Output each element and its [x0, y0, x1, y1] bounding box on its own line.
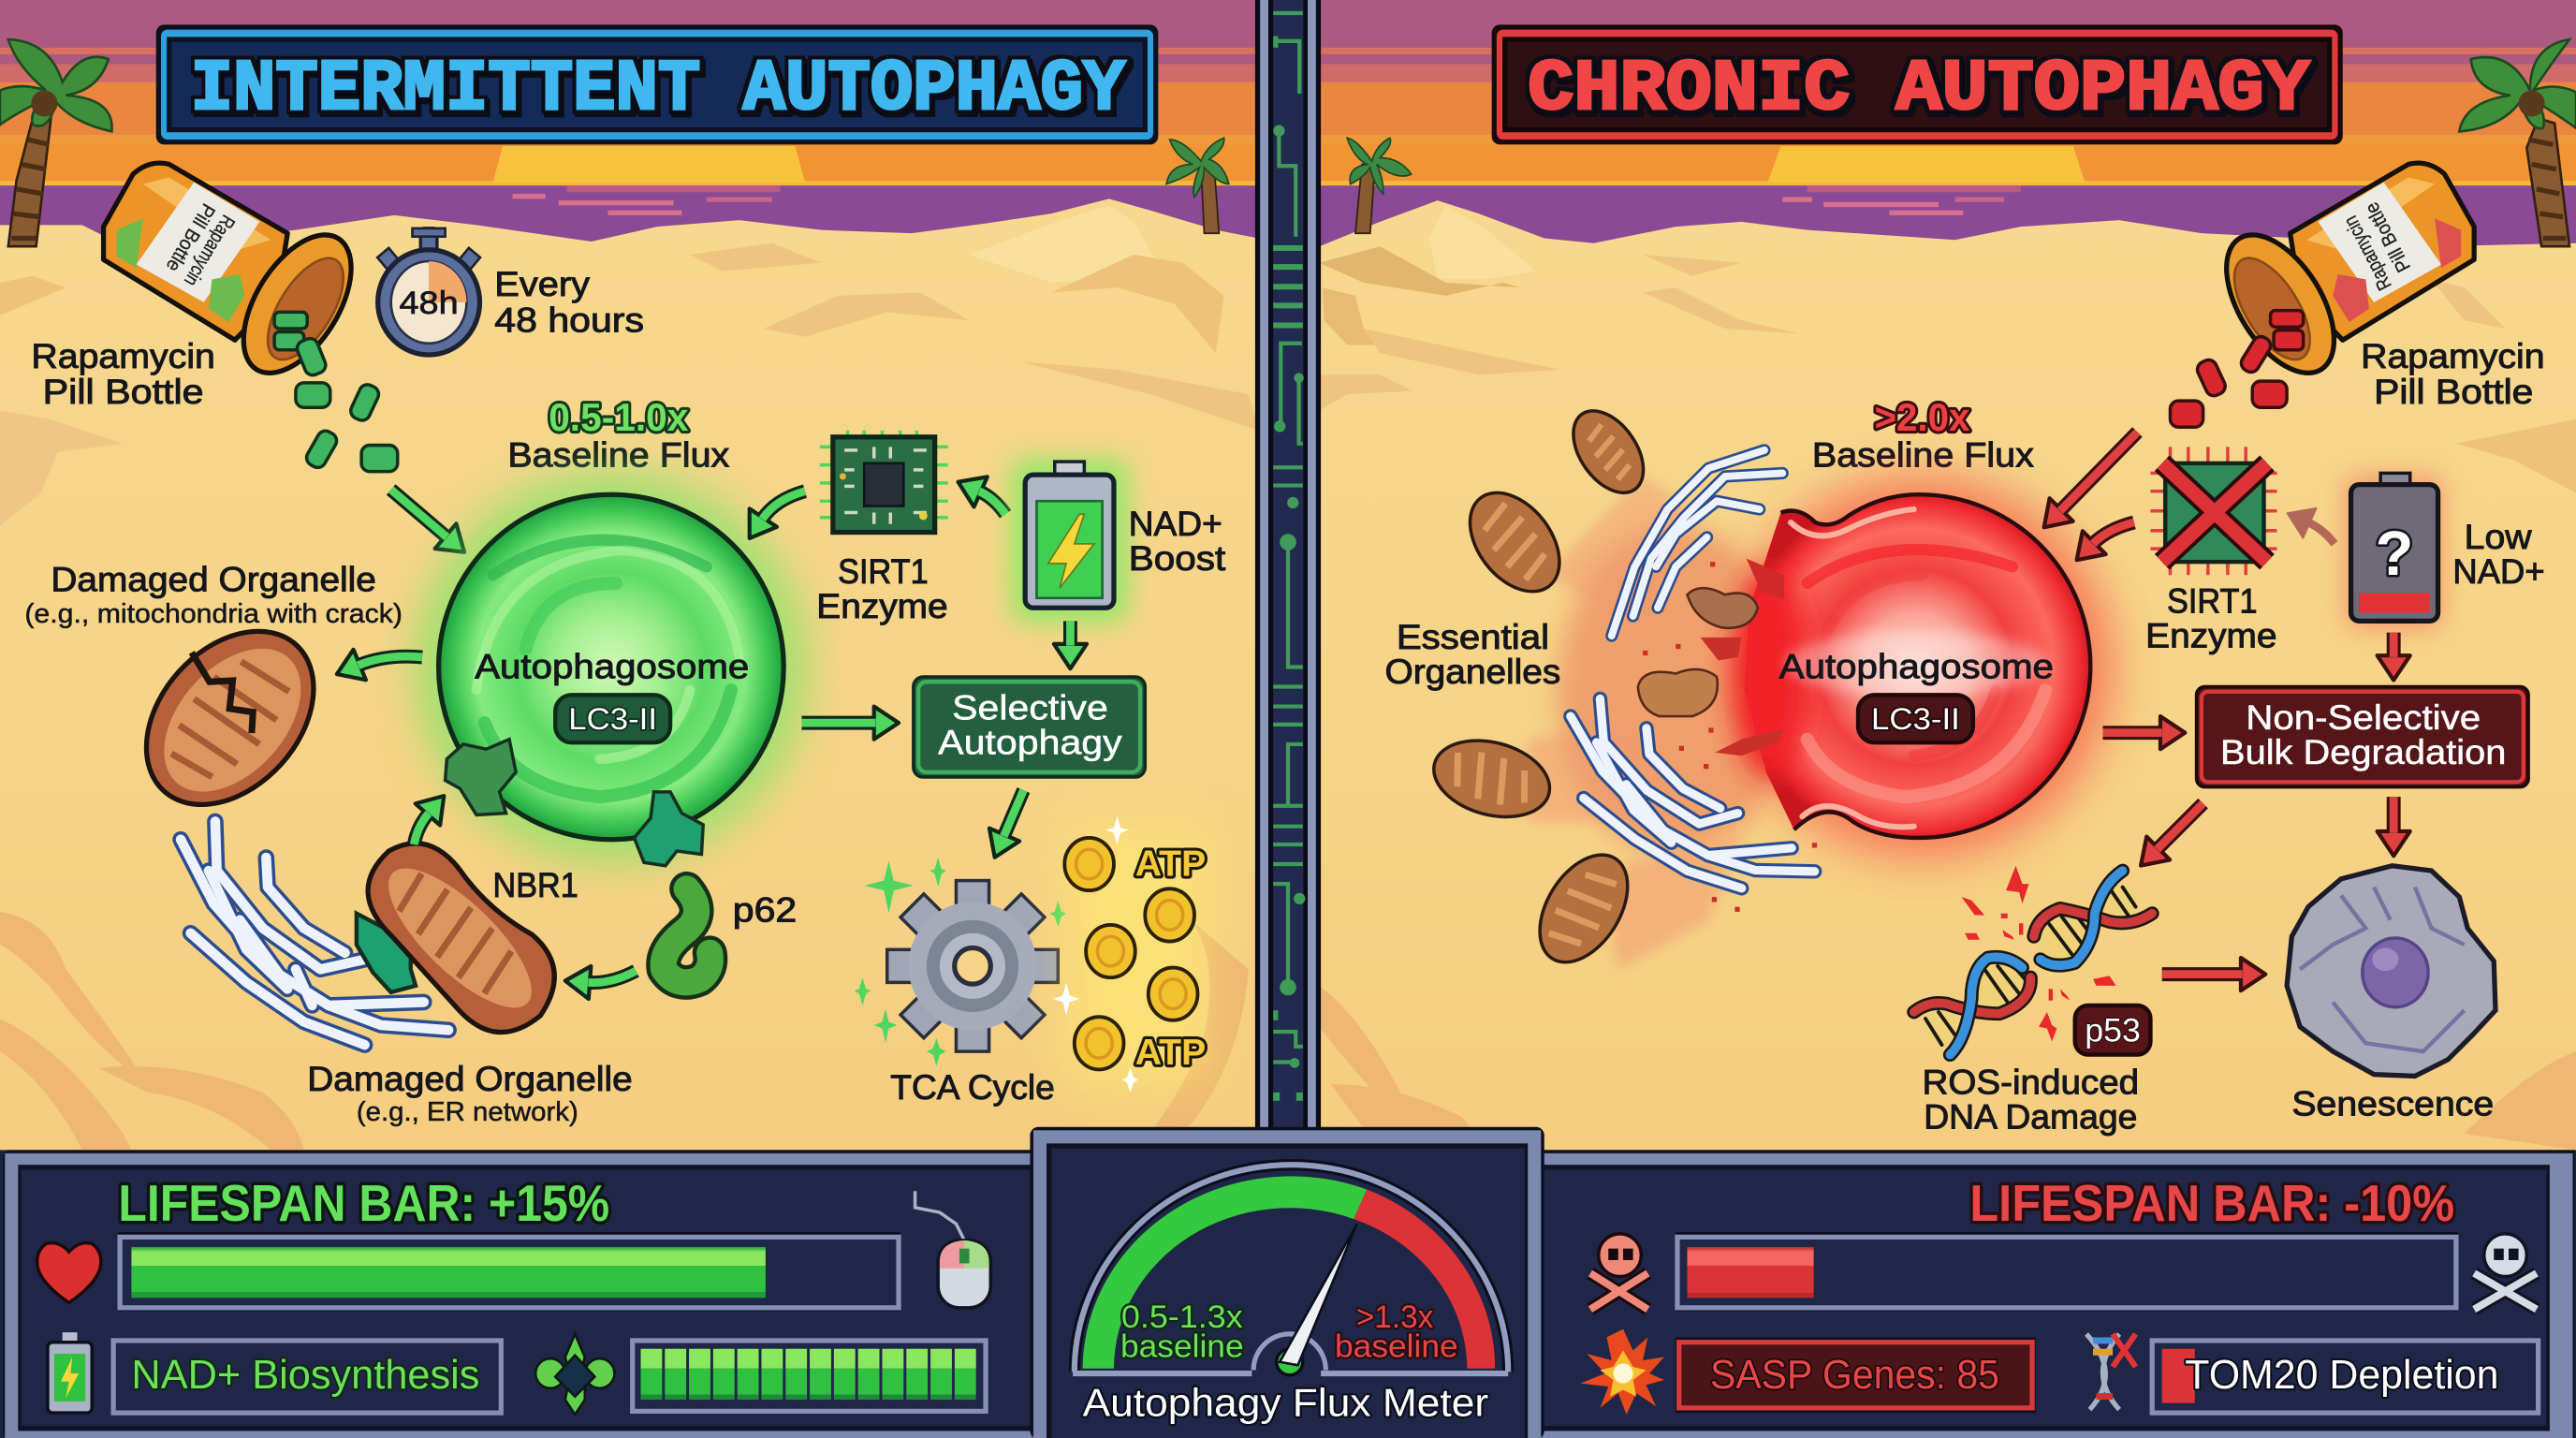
arrow: low NAD+ to bulk degradation [2390, 633, 2397, 657]
arrow: pills to sphere red [2060, 433, 2137, 511]
arrow: bulk degradation to senescence [2390, 797, 2397, 833]
palm tree right large [2459, 39, 2576, 246]
gauge red zone [1354, 1189, 1495, 1369]
box: non-selective bulk degradation: Bulk Degradation [2220, 733, 2506, 771]
icon: TCA cycle gear [887, 881, 1058, 1051]
box: SASP genes 85: SASP Genes: 85 [1710, 1352, 1999, 1398]
heading: lifespan bar +15%: LIFESPAN BAR: +15% [118, 1175, 609, 1232]
arrow: mitochondrion to sphere [414, 814, 429, 844]
label: rapamycin pill bottle left: Pill Bottle [43, 373, 204, 411]
label: NAD+ boost [1129, 505, 1225, 578]
lifespan progress bar green [118, 1232, 900, 1311]
label: SIRT1 enzyme right: Enzyme [2145, 616, 2277, 654]
label: damaged organelle ER [307, 1060, 633, 1127]
box: NAD+ biosynthesis: NAD+ Biosynthesis [131, 1352, 479, 1398]
pills spilling red [2170, 311, 2304, 427]
label: p62: p62 [733, 890, 797, 929]
label: rapamycin pill bottle right [2361, 337, 2545, 411]
badge: LC3-II left [555, 695, 670, 742]
icon: computer mouse [915, 1191, 990, 1308]
box: TOM20 depletion [2152, 1341, 2539, 1413]
label: baseline flux left: 0.5-1.0x [549, 395, 689, 439]
arrow: autophagosome to selective autophagy [801, 719, 875, 726]
palm tree left small [1166, 138, 1229, 233]
label: senescence: Senescence [2291, 1085, 2494, 1123]
arrow: autophagosome to damaged mitochondrion [359, 656, 422, 666]
segmented NAD bar [633, 1341, 986, 1411]
label: rapamycin pill bottle right: Rapamycin [2361, 337, 2545, 375]
label: every 48 hours [494, 265, 644, 339]
label: baseline flux right: >2.0x [1875, 395, 1970, 439]
gauge green zone [1083, 1176, 1367, 1369]
label: low NAD+: Low [2465, 518, 2532, 556]
badge: p53 [2075, 1005, 2150, 1055]
gauge label: green range: baseline [1120, 1328, 1244, 1364]
title: intermittent autophagy [156, 24, 1158, 144]
box: SASP genes 85 [1676, 1337, 2036, 1413]
label: SIRT1 enzyme right: SIRT1 [2167, 582, 2258, 621]
icon: pink skull [1590, 1234, 1647, 1310]
icon: senescent cell [2287, 866, 2496, 1076]
icon: explosion [1580, 1329, 1664, 1415]
NBR1 blob on sphere [446, 740, 516, 814]
icon: rapamycin pill bottle right: Pill Bottle [2361, 198, 2415, 275]
box: NAD+ biosynthesis [113, 1341, 501, 1413]
label: baseline flux left: Baseline Flux [507, 435, 730, 474]
palm tree right small [1347, 138, 1412, 233]
icon: ER network [181, 821, 448, 1045]
autophagosome red ruptured sphere [1732, 494, 2090, 838]
icon: p62 protein [664, 888, 710, 982]
icon: ATP coins: ATP [1135, 844, 1206, 884]
pills spilling green [295, 336, 398, 472]
icon: rapamycin pill bottle right: Rapamycin [2340, 213, 2396, 294]
ER fragments being engulfed [1570, 450, 1815, 897]
sparkles around gear [855, 858, 1066, 1066]
arrow: selective autophagy to TCA cycle [1003, 790, 1023, 836]
box: selective autophagy [914, 677, 1145, 777]
label: rapamycin pill bottle left: Rapamycin [31, 337, 215, 375]
gauge label: red range: baseline [1335, 1328, 1458, 1364]
label: ROS-induced DNA damage: ROS-induced [1922, 1064, 2139, 1102]
gauge label: red range [1335, 1299, 1458, 1364]
icon: stopwatch 48h [377, 228, 480, 355]
gauge rim [1075, 1165, 1508, 1372]
icon: rapamycin pill bottle [104, 163, 373, 391]
label: damaged organelle mitochondria: (e.g., mitochondria with crack) [24, 599, 402, 629]
label: autophagosome left: Autophagosome [475, 648, 749, 686]
icon: ATP coins: ATP [1135, 1033, 1206, 1073]
icon: broken DNA helix [1914, 866, 2152, 1055]
label: SIRT1 enzyme right [2145, 582, 2277, 654]
sunset sky left [0, 0, 1258, 251]
red burst haze [1528, 477, 2113, 969]
label: SIRT1 enzyme left [816, 552, 948, 625]
icon: white skull [2474, 1234, 2537, 1310]
arrow: battery to selective autophagy [1066, 621, 1075, 646]
essential mitochondria being engulfed [1426, 398, 1817, 977]
box: selective autophagy: Autophagy [938, 723, 1122, 761]
panel: left stats HUD [4, 1150, 1057, 1438]
arrow: pills to autophagosome [391, 490, 446, 537]
label: every 48 hours: Every [494, 265, 591, 303]
icon: damaged mitochondrion lower [343, 822, 577, 1053]
badge: LC3-II right: LC3-II [1871, 702, 1960, 736]
label: baseline flux right [1812, 395, 2034, 474]
icon: SIRT1 chip crossed out [2150, 447, 2277, 575]
arrow: p62 to mitochondrion [588, 971, 636, 983]
panel: intermittent autophagy scene [0, 0, 1258, 1150]
arrow: sphere to bulk degradation [2103, 728, 2162, 737]
arrow: SIRT1 to autophagosome [762, 492, 805, 520]
label: ROS-induced DNA damage: DNA Damage [1924, 1098, 2137, 1137]
arrow: SIRT1 to sphere red [2093, 522, 2134, 544]
panel: autophagy flux meter [1030, 1127, 1544, 1438]
label: SIRT1 enzyme left: SIRT1 [838, 552, 929, 591]
icon: cracked mitochondrion [110, 596, 347, 837]
label: essential organelles: Organelles [1385, 653, 1560, 691]
label: ROS-induced DNA damage [1922, 1064, 2139, 1137]
arrow: battery to SIRT1 [979, 492, 1005, 514]
box: selective autophagy: Selective [952, 689, 1108, 727]
lifespan progress bar red [1676, 1232, 2458, 1311]
title: intermittent autophagy: INTERMITTENT AUTOPHAGY [191, 50, 1126, 131]
label: essential organelles [1385, 618, 1560, 691]
title: chronic autophagy: CHRONIC AUTOPHAGY [1528, 50, 2310, 131]
gauge needle [1253, 1224, 1357, 1375]
icon: NAD+ battery glowing [1012, 460, 1127, 621]
label: autophagosome right: Autophagosome [1779, 648, 2054, 686]
label: TCA cycle: TCA Cycle [890, 1068, 1055, 1107]
badge: LC3-II right [1858, 695, 1973, 742]
label: damaged organelle ER: Damaged Organelle [307, 1060, 633, 1098]
icon: heart [37, 1243, 101, 1303]
dunes left [0, 198, 1258, 1150]
badge: p53: p53 [2085, 1013, 2141, 1049]
label: rapamycin pill bottle right: Pill Bottle [2374, 373, 2533, 411]
label: damaged organelle mitochondria: Damaged Organelle [51, 561, 376, 599]
icon: low NAD+ battery: ? [2376, 520, 2413, 589]
label: essential organelles: Essential [1397, 618, 1549, 656]
panel: right stats HUD [1521, 1150, 2574, 1438]
NBR1 teal receptor [357, 914, 416, 992]
icon: low NAD+ battery [2346, 473, 2441, 627]
palm tree left large [0, 39, 112, 246]
icon: DNA with X [2086, 1334, 2136, 1410]
label: every 48 hours: 48 hours [494, 301, 644, 339]
badge: LC3-II left: LC3-II [568, 702, 657, 736]
heading: lifespan bar -10%: LIFESPAN BAR: -10% [1969, 1175, 2454, 1232]
gauge label: green range [1120, 1299, 1244, 1364]
label: low NAD+ [2452, 518, 2545, 591]
gauge base lines [1073, 1372, 1508, 1375]
label: baseline flux right: Baseline Flux [1812, 435, 2034, 474]
icon: SIRT1 chip green [820, 431, 948, 533]
label: damaged organelle mitochondria [24, 561, 402, 629]
icon: rapamycin pill bottle: Pill Bottle [162, 199, 219, 275]
label: SIRT1 enzyme left: Enzyme [816, 587, 948, 625]
box: non-selective bulk degradation [2197, 687, 2528, 787]
title: chronic autophagy [1492, 24, 2343, 144]
label: NAD+ boost: Boost [1129, 539, 1225, 578]
icon: green molecule cross [535, 1334, 614, 1415]
gauge label: red range: >1.3x [1356, 1299, 1433, 1335]
box: TOM20 depletion: TOM20 Depletion [2185, 1352, 2499, 1398]
icon: stopwatch 48h: 48h [399, 286, 459, 321]
label: autophagy flux meter: Autophagy Flux Meter [1083, 1381, 1488, 1425]
label: NAD+ boost: NAD+ [1129, 505, 1222, 543]
panel: chronic autophagy scene [1319, 0, 2576, 1150]
label: baseline flux left [507, 395, 730, 474]
label: low NAD+: NAD+ [2452, 552, 2545, 591]
panel: central circuit divider [1255, 0, 1321, 1150]
box: non-selective bulk degradation: Non-Selective [2246, 698, 2481, 737]
icon: rapamycin pill bottle right [2204, 163, 2474, 391]
arrow: battery to SIRT1 faded [2308, 522, 2334, 544]
sunset sky right [1319, 0, 2576, 251]
sun left [493, 146, 805, 215]
label: NBR1: NBR1 [493, 866, 578, 904]
sun right [1767, 146, 2085, 215]
gauge label: green range: 0.5-1.3x [1121, 1299, 1243, 1335]
dunes right [1319, 200, 2576, 1150]
label: rapamycin pill bottle left [31, 337, 215, 411]
icon: small NAD battery [48, 1332, 92, 1413]
p62 blob on sphere [634, 792, 703, 866]
icon: rapamycin pill bottle: Rapamycin [180, 212, 239, 290]
label: damaged organelle ER: (e.g., ER network) [357, 1097, 578, 1127]
arrow: bulk degradation to DNA damage [2157, 803, 2203, 849]
arrow: DNA damage to senescence [2162, 970, 2243, 978]
autophagosome green sphere [417, 473, 805, 866]
icon: ATP coins [1053, 816, 1208, 1093]
